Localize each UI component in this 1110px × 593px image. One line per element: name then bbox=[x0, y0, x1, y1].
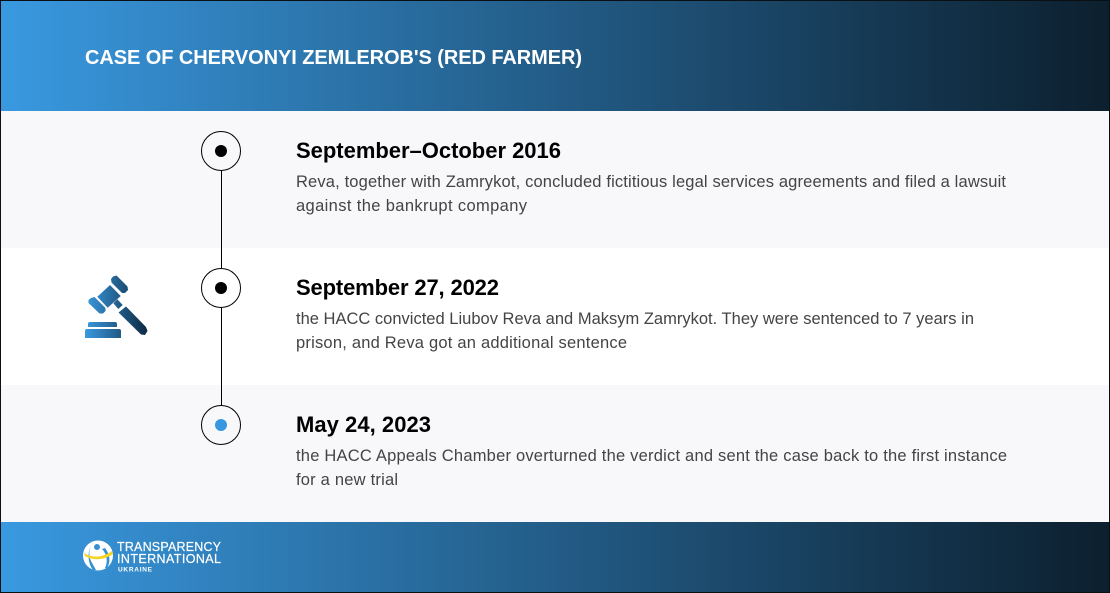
event 2 text bbox=[296, 275, 974, 352]
logo: Transparency International Ukraine: INTERNATIONAL bbox=[117, 552, 221, 566]
logo: Transparency International Ukraine bbox=[83, 540, 222, 574]
timeline marker 1 bbox=[202, 132, 240, 170]
event 1 text: Reva, together with Zamrykot, concluded fictitious legal services agreements and filed a lawsuit bbox=[296, 173, 1006, 191]
title: CASE OF CHERVONYI ZEMLEROB'S (RED FARMER) bbox=[85, 47, 582, 69]
footer banner bbox=[0, 522, 1110, 593]
timeline marker 2 bbox=[202, 268, 240, 308]
logo: Transparency International Ukraine: UKRAINE bbox=[118, 566, 153, 574]
row background: September–October 2016 bbox=[0, 111, 1110, 248]
event 2 text: prison, and Reva got an additional sentence bbox=[296, 334, 627, 352]
event 3 text: May 24, 2023 bbox=[296, 412, 431, 437]
logo: Transparency International Ukraine: TRANSPARENCY bbox=[117, 540, 222, 554]
event 1 text: September–October 2016 bbox=[296, 138, 561, 163]
event 3 text: the HACC Appeals Chamber overturned the verdict and sent the case back to the first instance bbox=[296, 447, 1007, 465]
event 2 text: September 27, 2022 bbox=[296, 275, 499, 300]
row background: May 24, 2023 bbox=[0, 385, 1110, 522]
timeline connector bbox=[220, 151, 222, 425]
event 3 text bbox=[296, 412, 1007, 489]
event 1 text: against the bankrupt company bbox=[296, 197, 528, 215]
event 2 text: the HACC convicted Liubov Reva and Maksym Zamrykot. They were sentenced to 7 years in bbox=[296, 310, 974, 328]
timeline marker 3 bbox=[202, 406, 240, 444]
icon: gavel bbox=[85, 276, 148, 338]
logo globe bbox=[83, 540, 113, 570]
row background: September 27, 2022 bbox=[0, 248, 1110, 385]
event 1 text bbox=[296, 138, 1006, 215]
header banner bbox=[0, 0, 1110, 111]
event 3 text: for a new trial bbox=[296, 471, 398, 489]
